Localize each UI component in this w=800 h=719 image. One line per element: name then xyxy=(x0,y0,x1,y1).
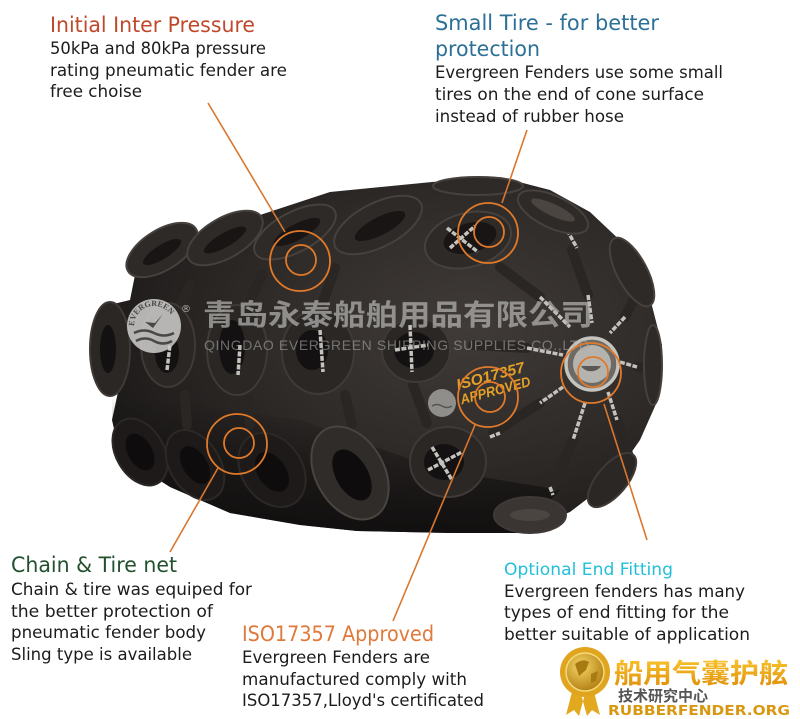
heading: protection xyxy=(435,37,540,62)
text block: ISO17357 approved xyxy=(242,622,484,711)
bottom row tires xyxy=(101,409,404,533)
dark underside shading xyxy=(112,395,560,533)
body: pneumatic fender body xyxy=(11,623,206,643)
callout marker: pressure xyxy=(208,103,330,291)
fender photo xyxy=(90,177,663,533)
middle row tire holes xyxy=(100,320,550,521)
end fitting xyxy=(566,338,618,390)
bottom row tire holes xyxy=(120,429,380,507)
body: ISO17357,Lloyd's certificated xyxy=(242,691,484,711)
text block: small tire xyxy=(435,11,723,127)
stamp logo xyxy=(428,389,456,417)
icon: gold medal xyxy=(560,647,610,716)
body: 50kPa and 80kPa pressure xyxy=(50,39,266,59)
heading: Initial Inter Pressure xyxy=(50,13,255,38)
site logo xyxy=(560,647,790,719)
middle row tires xyxy=(90,302,645,533)
heading: Small Tire - for better xyxy=(435,11,659,36)
body xyxy=(435,63,723,127)
body: Evergreen Fenders are xyxy=(242,648,430,668)
text block: optional end fitting xyxy=(504,560,750,645)
ISO stamp: APPROVED xyxy=(458,373,532,407)
text block: initial inter pressure xyxy=(50,13,287,102)
watermark chinese name: 青岛永泰船舶用品有限公司 xyxy=(203,292,593,334)
watermark english name: QINGDAO EVERGREEN SHIPPING SUPPLIES CO.,LTD xyxy=(204,337,589,353)
rope sleeves and chains xyxy=(180,230,652,495)
callout marker: end fitting xyxy=(561,343,647,540)
body: free choise xyxy=(50,82,142,102)
ISO stamp: ISO17357 xyxy=(455,359,527,394)
body: manufactured comply with xyxy=(242,670,467,690)
body: Evergreen Fenders use some small xyxy=(435,63,723,83)
watermark logo: EVERGREEN xyxy=(128,300,175,326)
body: rating pneumatic fender are xyxy=(50,61,287,81)
heading: Optional End Fitting xyxy=(504,560,673,580)
heading xyxy=(435,11,659,62)
body: Chain & tire was equiped for xyxy=(11,580,252,600)
watermark xyxy=(127,292,593,353)
body: tires on the end of cone surface xyxy=(435,85,704,105)
body: the better protection of xyxy=(11,602,214,622)
body xyxy=(242,648,484,711)
heading: Chain & Tire net xyxy=(11,553,177,578)
top row tires xyxy=(117,177,663,405)
watermark logo xyxy=(127,299,191,353)
callout marker: chain and tire net xyxy=(170,414,267,552)
body xyxy=(50,39,287,102)
heading: ISO17357 Approved xyxy=(242,622,434,647)
body: types of end fitting for the xyxy=(504,603,729,623)
logo subtitle: 技术研究中心 xyxy=(618,685,708,706)
body xyxy=(11,580,252,665)
body: Evergreen fenders has many xyxy=(504,582,745,602)
tire cross chains xyxy=(167,226,478,480)
callout marker: ISO approved xyxy=(393,367,518,621)
watermark logo: ® xyxy=(181,304,191,315)
ISO stamp xyxy=(454,359,532,407)
logo chinese title: 船用气囊护舷 xyxy=(614,652,788,691)
logo url: RUBBERFENDER.ORG xyxy=(608,704,790,719)
top row tire holes xyxy=(140,194,577,270)
callout marker: small tire xyxy=(458,130,527,263)
body: instead of rubber hose xyxy=(435,107,624,127)
fender body xyxy=(92,177,662,533)
text block: chain and tire net xyxy=(11,553,252,665)
body xyxy=(504,582,750,645)
body: better suitable of application xyxy=(504,625,750,645)
body: Sling type is available xyxy=(11,645,192,665)
